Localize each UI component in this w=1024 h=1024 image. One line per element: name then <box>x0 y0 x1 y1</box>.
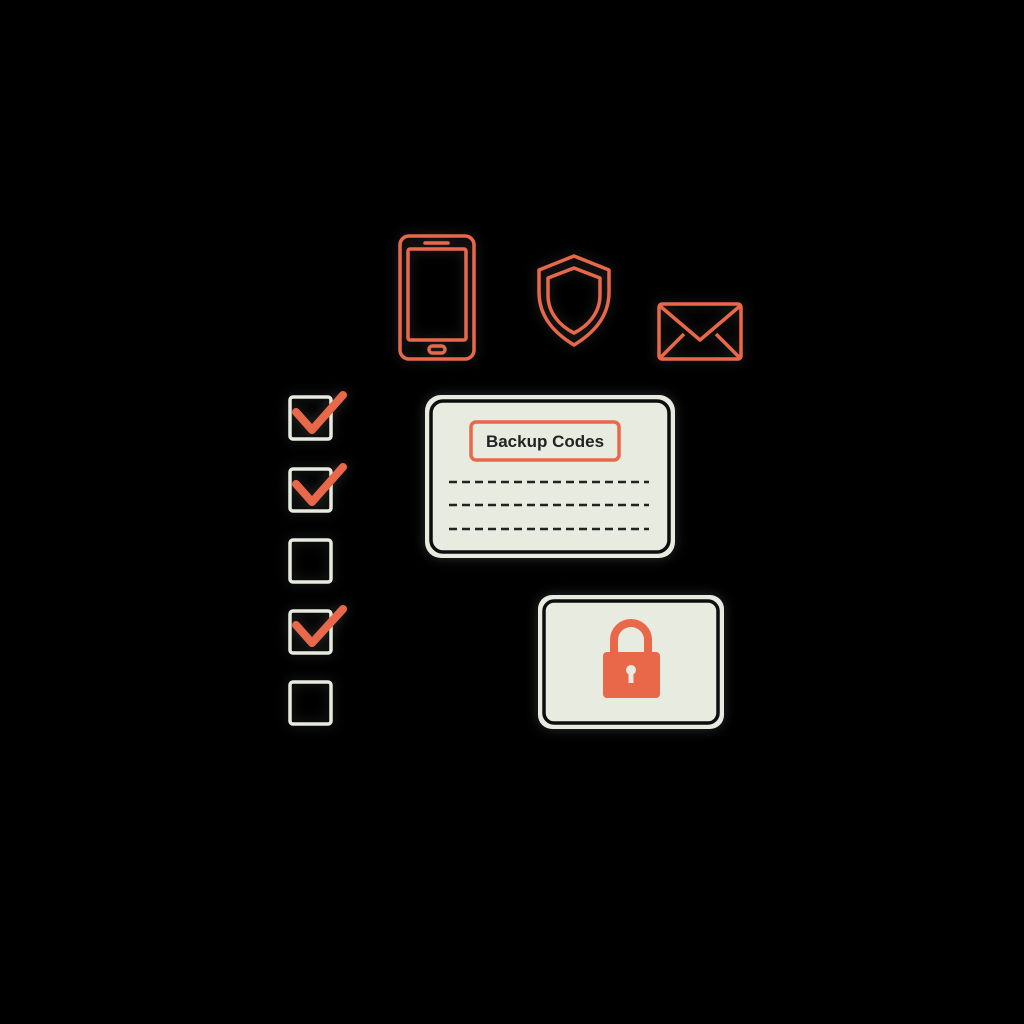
code lines <box>449 482 649 529</box>
card: lock <box>538 595 724 729</box>
icon: phone <box>400 236 474 359</box>
card: backup codes <box>425 395 675 558</box>
checkbox 5 <box>290 682 331 724</box>
checkbox 2 <box>290 467 343 511</box>
label: Backup Codes: Backup Codes <box>486 432 604 451</box>
checkbox 4 <box>290 609 343 653</box>
checklist <box>290 395 343 724</box>
label: Backup Codes <box>471 422 619 460</box>
icon: shield <box>539 256 609 345</box>
icon: padlock <box>603 623 660 698</box>
icon: envelope <box>659 304 741 359</box>
checkbox 1 <box>290 395 343 439</box>
checkbox 3 <box>290 540 331 582</box>
